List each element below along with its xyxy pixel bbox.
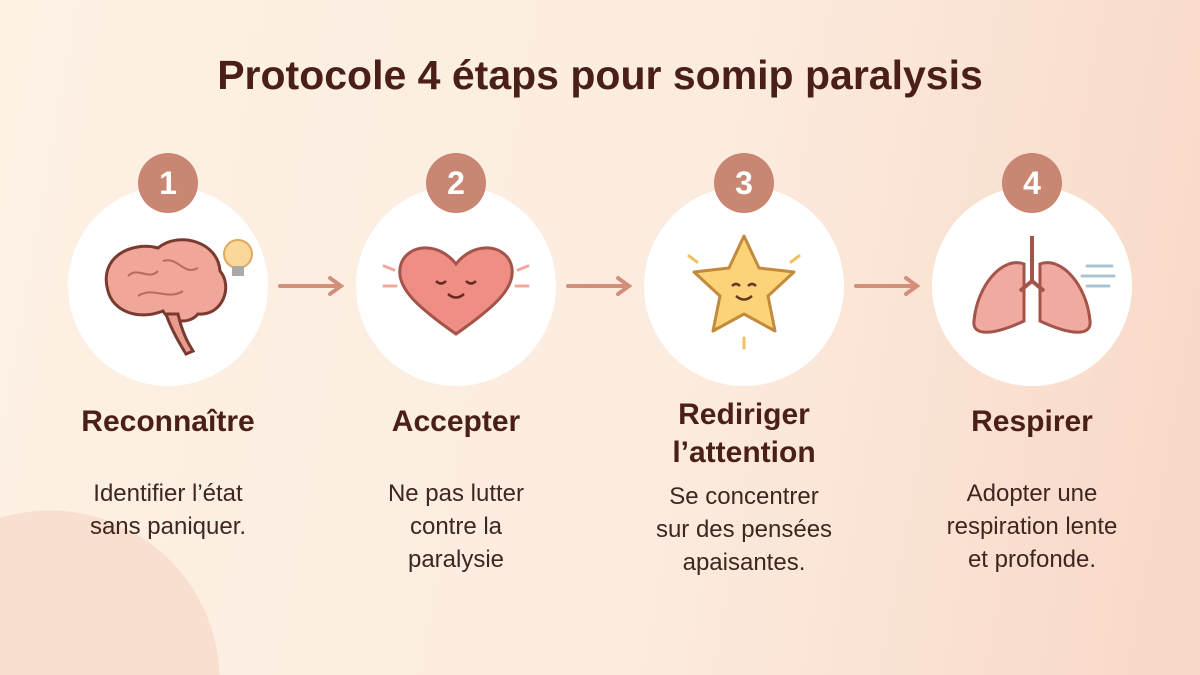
step 2: Accepter <box>356 153 556 573</box>
description <box>90 480 246 540</box>
heading: Respirer <box>971 405 1093 438</box>
description: Se concentrer <box>669 483 819 510</box>
icon circle: star <box>644 186 844 386</box>
arrow 2 <box>566 276 632 296</box>
heading: Rediriger <box>678 398 810 431</box>
badge 3 <box>714 153 774 213</box>
badge 1: 1 <box>159 165 177 201</box>
step 1: Reconnaître <box>68 153 268 540</box>
description <box>388 480 524 573</box>
description: sans paniquer. <box>90 513 246 540</box>
icon circle: lungs <box>932 186 1132 386</box>
description: respiration lente <box>947 513 1117 540</box>
badge 1 <box>138 153 198 213</box>
heading: l’attention <box>672 436 816 469</box>
badge 4: 4 <box>1023 165 1041 201</box>
description: paralysie <box>408 546 504 573</box>
title: Protocole 4 étaps pour somip paralysis <box>217 52 983 98</box>
badge 2 <box>426 153 486 213</box>
description: apaisantes. <box>683 549 805 576</box>
heading: Reconnaître <box>81 405 255 438</box>
description <box>947 480 1117 573</box>
arrow 3 <box>854 276 920 296</box>
description: Adopter une <box>967 480 1097 507</box>
badge 3: 3 <box>735 165 753 201</box>
icon circle: heart <box>356 186 556 386</box>
badge 2: 2 <box>447 165 465 201</box>
icon circle: brain <box>68 186 268 386</box>
badge 4 <box>1002 153 1062 213</box>
arrow 1 <box>278 276 344 296</box>
description: sur des pensées <box>656 516 832 543</box>
heading: Accepter <box>392 405 520 438</box>
description: Ne pas lutter <box>388 480 524 507</box>
description <box>656 483 832 576</box>
description: Identifier l’état <box>93 480 243 507</box>
description: et profonde. <box>968 546 1096 573</box>
heading <box>672 398 816 469</box>
description: contre la <box>410 513 502 540</box>
step 4: Respirer <box>932 153 1132 573</box>
step 3: Rediriger l'attention <box>644 153 844 576</box>
